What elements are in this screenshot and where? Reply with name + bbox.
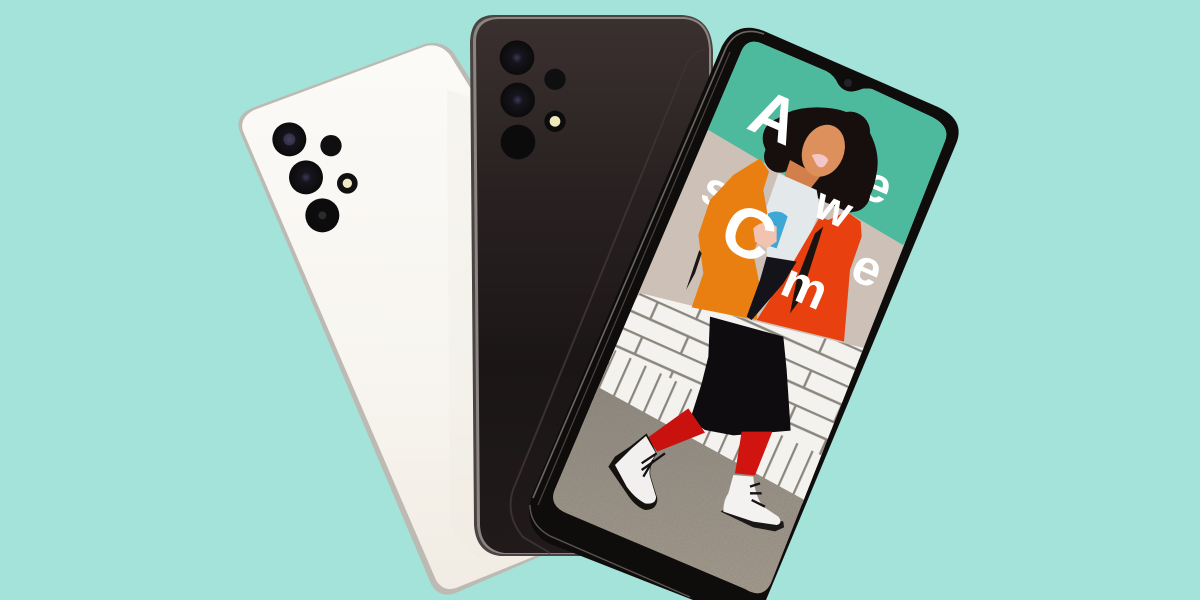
face — [802, 124, 845, 177]
screen: pavement — [553, 388, 804, 594]
front phone bezel — [529, 28, 959, 600]
front phone camera notch lens — [844, 79, 852, 87]
cup — [768, 212, 788, 248]
woman upper body — [686, 107, 878, 342]
screen letters over figure: C — [710, 187, 787, 279]
black phone cameras — [500, 40, 566, 159]
screen letters over figure: m — [774, 252, 837, 321]
neck — [784, 160, 820, 188]
shirt — [767, 173, 820, 262]
screen letters behind figure: e — [844, 237, 891, 299]
red leg right — [735, 432, 772, 475]
hair — [763, 107, 878, 213]
smile — [812, 154, 828, 167]
black phone back contour — [511, 50, 705, 553]
screen letters behind figure: e — [854, 154, 901, 216]
woman lower body — [608, 317, 791, 531]
hanging straps — [686, 250, 702, 290]
boot right — [720, 510, 784, 532]
screen letters over figure: w — [806, 176, 861, 239]
white phone cameras — [272, 122, 358, 232]
black phone — [470, 15, 713, 556]
screen: beige wall — [580, 42, 946, 430]
laces right — [750, 483, 765, 507]
boot left — [608, 433, 657, 510]
front phone screen — [553, 42, 946, 594]
white phone body — [238, 43, 560, 595]
screen letters behind figure — [702, 174, 889, 286]
screen letters over figure — [726, 94, 854, 310]
white phone — [238, 43, 560, 595]
black phone body — [470, 15, 713, 556]
hand — [753, 223, 777, 248]
side sheen — [447, 90, 510, 558]
screen letters behind figure: s — [694, 161, 739, 221]
screen: brick wall — [590, 293, 880, 510]
screen: pavement grain — [555, 388, 804, 593]
jacket right — [757, 212, 862, 342]
dark inner shirt — [747, 257, 797, 320]
illustration: three phones — [238, 15, 959, 600]
screen letters over figure: A — [739, 75, 811, 159]
red leg left — [647, 408, 705, 452]
front phone — [529, 20, 970, 600]
jacket left — [692, 158, 769, 320]
laces left — [642, 453, 665, 477]
screen: lower bricks — [598, 350, 822, 502]
skirt — [690, 317, 791, 435]
screen: green panel — [708, 42, 946, 245]
